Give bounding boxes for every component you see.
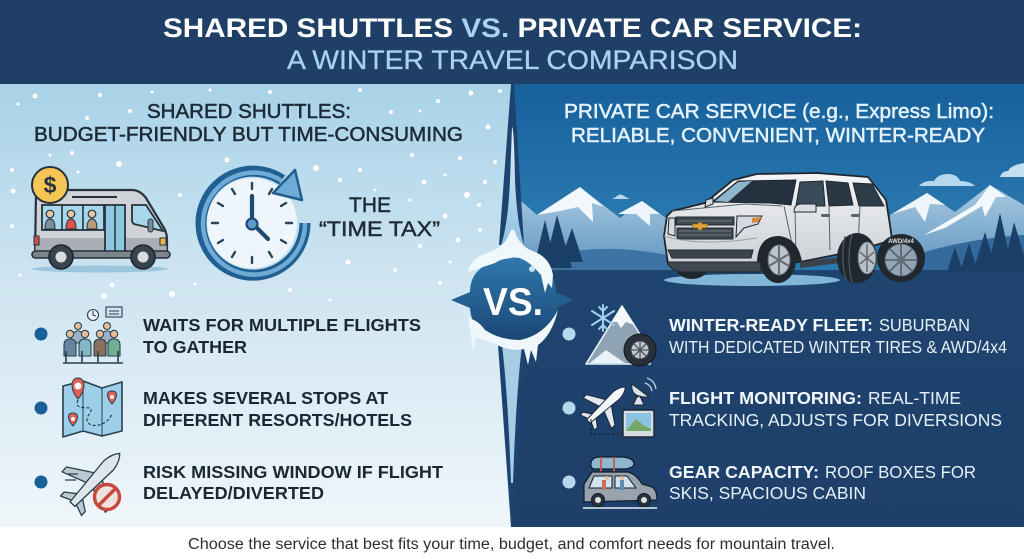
snowfall background xyxy=(10,88,502,302)
text: waits for multiple flights: WAITS FOR MULTIPLE FLIGHTS xyxy=(143,315,421,335)
panel: private car service xyxy=(512,84,1024,527)
illustration: silver SUV with winter tires: AWD/4x4 xyxy=(888,239,914,245)
text: waits for multiple flights xyxy=(143,315,421,357)
icon: snowflake, mountain and tire xyxy=(586,305,656,366)
icon: map with pins xyxy=(63,378,122,437)
heading: shared shuttles: BUDGET-FRIENDLY BUT TIME-CONSUMING xyxy=(34,124,463,146)
text: flight monitoring xyxy=(669,388,1002,430)
list item: flight monitoring xyxy=(562,372,1002,438)
title: A WINTER TRAVEL COMPARISON xyxy=(287,45,738,75)
far front wheel xyxy=(676,257,708,279)
text: makes several stops xyxy=(143,388,412,430)
spare winter tire, side view xyxy=(837,233,877,283)
divider with icicles and VS badge xyxy=(451,84,573,527)
text: risk missing window xyxy=(143,462,443,503)
heading: private car service: PRIVATE CAR SERVICE (e.g., Express Limo): xyxy=(564,101,994,123)
icon: shuttle bus with dollar coin: $ xyxy=(44,172,57,198)
illustration: silver SUV with winter tires xyxy=(664,173,925,283)
snow cap bottom xyxy=(468,310,558,365)
hood and door lines xyxy=(672,204,860,258)
headlights xyxy=(736,216,762,237)
header band xyxy=(0,0,1024,84)
icon: shuttle bus with dollar coin xyxy=(32,167,170,272)
label: the time tax: “TIME TAX” xyxy=(319,218,440,241)
spare winter tire with AWD label xyxy=(877,234,925,282)
text: makes several stops: DIFFERENT RESORTS/HOTELS xyxy=(143,410,412,430)
text: gear capacity: SKIS, SPACIOUS CABIN xyxy=(669,483,866,503)
text: waits for multiple flights: TO GATHER xyxy=(143,337,247,357)
label: the time tax xyxy=(319,194,440,241)
snow cap top xyxy=(468,230,553,293)
heading: private car service: RELIABLE, CONVENIENT, WINTER-READY xyxy=(571,125,985,147)
text: flight monitoring: REAL-TIME xyxy=(868,388,961,408)
text: winter-ready fleet xyxy=(669,315,1007,357)
windows xyxy=(712,180,796,205)
icon: plane with prohibition sign xyxy=(49,433,141,526)
text: flight monitoring: FLIGHT MONITORING: xyxy=(669,388,862,408)
icon: plane, satellite dish and monitor xyxy=(573,372,656,438)
text: gear capacity xyxy=(669,462,976,503)
bumper xyxy=(664,236,757,242)
list item: gear capacity xyxy=(562,457,976,508)
icon: waiting passengers xyxy=(63,307,123,363)
text: makes several stops: MAKES SEVERAL STOPS AT xyxy=(143,388,388,408)
mountain scenery xyxy=(512,163,1024,300)
list item: winter-ready fleet xyxy=(562,305,1007,366)
text: flight monitoring: TRACKING, ADJUSTS FOR DIVERSIONS xyxy=(669,410,1002,430)
panel: shared shuttles xyxy=(0,84,513,527)
heading: shared shuttles xyxy=(34,101,463,146)
label: the time tax: THE xyxy=(349,194,391,217)
footer note: Choose the service that best fits your time, budget, and comfort needs for mountain travel. xyxy=(188,536,835,553)
text: winter-ready fleet: WINTER-READY FLEET: xyxy=(669,315,873,335)
text: gear capacity: GEAR CAPACITY: xyxy=(669,462,819,482)
grille xyxy=(676,217,734,225)
front wheel xyxy=(757,236,802,262)
title: SHARED SHUTTLES VS. PRIVATE CAR SERVICE: xyxy=(163,13,862,43)
heading: private car service xyxy=(564,101,994,147)
VS badge xyxy=(451,230,573,365)
list item: risk missing window xyxy=(34,433,443,526)
text: winter-ready fleet: SUBURBAN xyxy=(879,315,970,335)
heading: shared shuttles: SHARED SHUTTLES: xyxy=(147,101,351,123)
VS text: VS. xyxy=(483,281,543,324)
icon: clock with arrow xyxy=(201,170,305,275)
title xyxy=(163,13,862,75)
text: gear capacity: ROOF BOXES FOR xyxy=(825,462,976,482)
SUV body xyxy=(664,173,892,272)
text: risk missing window: RISK MISSING WINDOW IF FLIGHT xyxy=(143,462,443,482)
icon: car with roof box xyxy=(583,457,657,508)
list item: waits for flights xyxy=(34,307,421,363)
text: risk missing window: DELAYED/DIVERTED xyxy=(143,483,324,503)
list item: several stops xyxy=(34,378,412,437)
